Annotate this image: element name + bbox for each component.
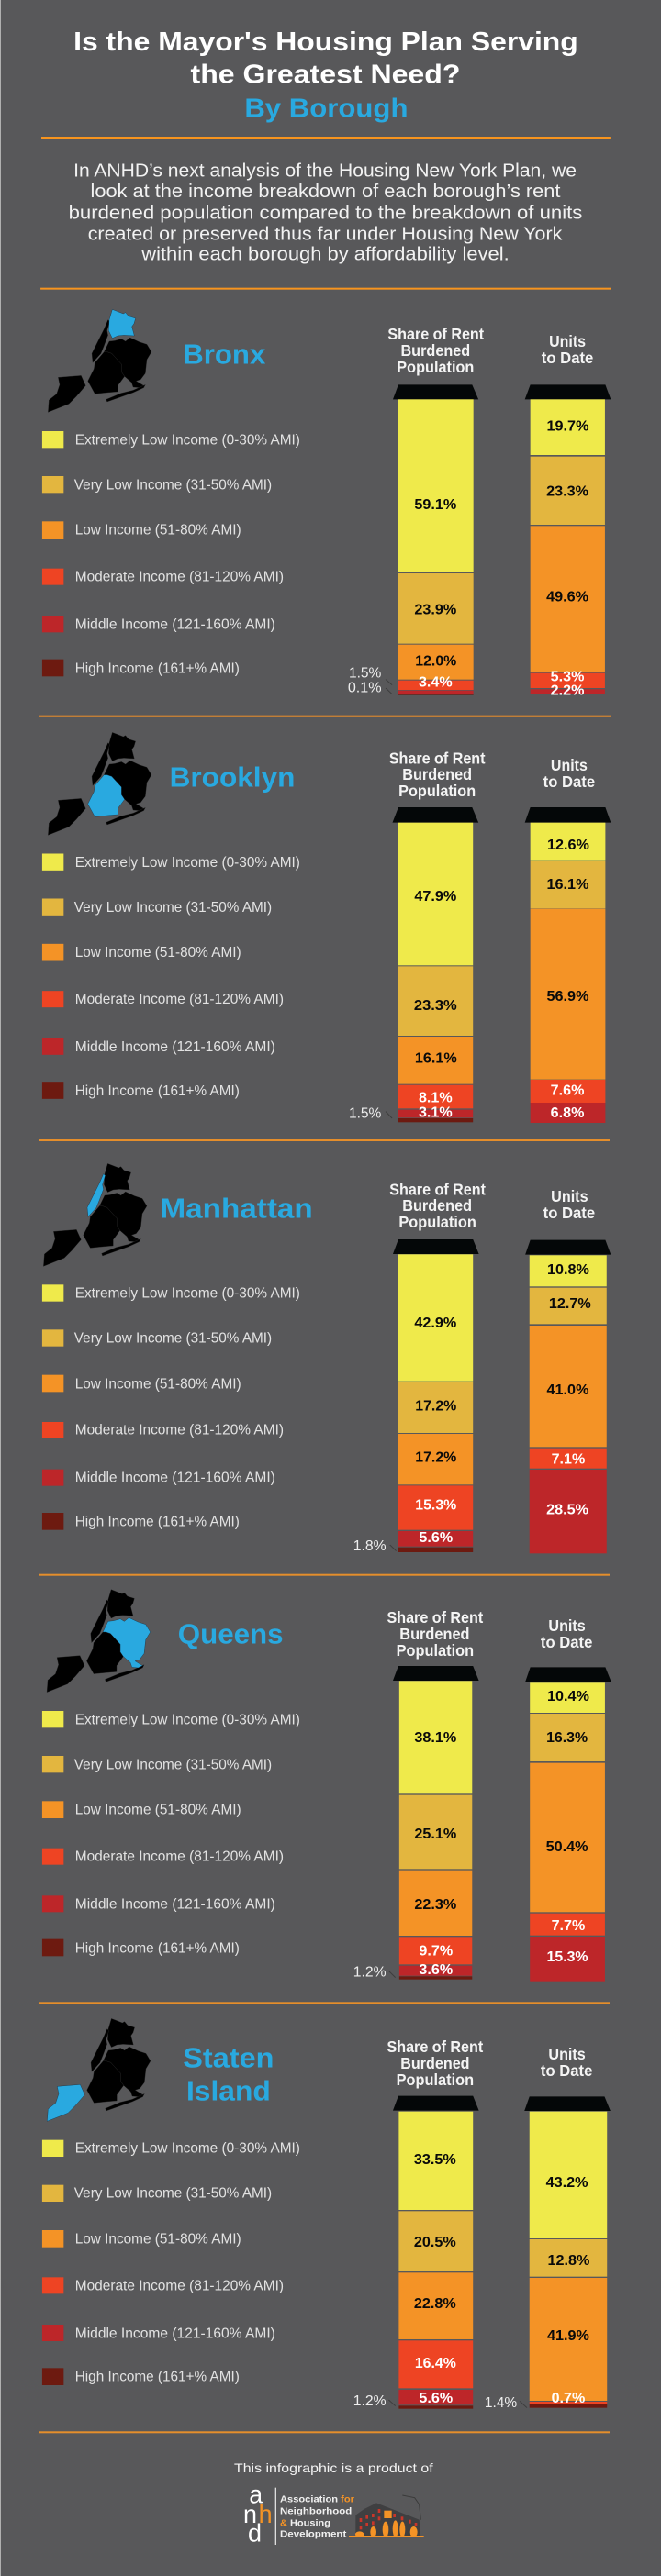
chart: share of rent burdened population: [349, 807, 478, 1122]
legend item: moderate: Moderate Income (81-120% AMI): [75, 1421, 284, 1438]
segment 15.3%: 15.3%: [547, 1949, 588, 1964]
segment 59.1%: [398, 399, 474, 572]
legend item: very low: Very Low Income (31-50% AMI): [74, 2184, 272, 2201]
legend item: high: [42, 660, 240, 676]
segment 23.3%: 23.3%: [414, 997, 457, 1013]
legend item: middle: Middle Income (121-160% AMI): [75, 1469, 275, 1485]
column heading: units: Units: [548, 1616, 586, 1635]
legend item: extremely low: Extremely Low Income (0-30% AMI): [75, 1285, 300, 1301]
heading: Brooklyn: Brooklyn: [170, 761, 295, 793]
column heading: units: [542, 331, 593, 367]
icon: NYC map, Manhattan highlighted: [43, 1163, 147, 1266]
panel: Brooklyn: [42, 732, 611, 1123]
segment 42.9%: 42.9%: [414, 1315, 456, 1330]
segment 3.1%: 3.1%: [419, 1105, 453, 1120]
legend item: high: High Income (161+% AMI): [75, 2368, 240, 2384]
segment 10.8%: 10.8%: [547, 1261, 589, 1277]
column heading: share: Share of Rent: [387, 2037, 483, 2056]
legend item: middle: Middle Income (121-160% AMI): [75, 2325, 275, 2341]
heading: Staten Island: Staten: [183, 2042, 274, 2073]
segment 19.7%: 19.7%: [547, 417, 589, 434]
legend item: low: Low Income (51-80% AMI): [75, 1801, 241, 1817]
column heading: units: Units: [549, 331, 586, 350]
legend item: low: Low Income (51-80% AMI): [75, 1375, 241, 1392]
segment 16.1%: 16.1%: [547, 876, 589, 892]
segment 23.3%: [531, 457, 605, 525]
legend item: low: [42, 1801, 241, 1818]
legend item: moderate: [42, 1848, 284, 1865]
segment 12.0%: 12.0%: [415, 652, 456, 669]
icon: NYC map, Brooklyn highlighted: [48, 732, 151, 835]
segment 15.3%: [530, 1937, 605, 1982]
segment 7.1%: [530, 1449, 607, 1469]
legend item: low: [42, 1375, 241, 1392]
column heading: units: to Date: [543, 772, 595, 791]
segment 17.2%: [398, 1434, 473, 1484]
segment 49.6%: [531, 526, 605, 672]
legend item: moderate: Moderate Income (81-120% AMI): [75, 568, 284, 584]
segment 7.7%: 7.7%: [552, 1917, 586, 1933]
legend item: very low: [42, 898, 272, 916]
column heading: units: to Date: [543, 1203, 595, 1222]
panel: Manhattan: [42, 1163, 611, 1553]
segment 33.5%: [398, 2112, 473, 2210]
side label 1.2%: 1.2%: [353, 2393, 387, 2408]
legend item: middle: Middle Income (121-160% AMI): [75, 1038, 275, 1054]
column heading: units: Units: [548, 2044, 586, 2063]
icon: NYC map, Bronx highlighted: [48, 309, 151, 412]
segment 6.8%: 6.8%: [551, 1105, 585, 1120]
logo: organisation name: Association for: [280, 2494, 354, 2504]
panel: Staten Island: [42, 2018, 611, 2410]
title: [73, 27, 578, 123]
segment 28.5%: [530, 1470, 607, 1553]
legend item: high: [42, 1082, 240, 1099]
legend item: middle: [42, 616, 275, 632]
segment 59.1%: 59.1%: [414, 496, 456, 512]
legend item: extremely low: Extremely Low Income (0-30% AMI): [75, 854, 300, 870]
segment 16.1%: [398, 1037, 473, 1084]
column heading: units: [541, 1616, 592, 1651]
segment 38.1%: [399, 1681, 472, 1793]
column heading: share: Population: [397, 1640, 474, 1660]
intro paragraph: within each borough by affordability level.: [140, 244, 510, 264]
segment 5.6%: [398, 1529, 473, 1547]
legend item: extremely low: Extremely Low Income (0-30% AMI): [75, 1711, 300, 1727]
column heading: units: [541, 2044, 592, 2080]
legend: [42, 431, 300, 676]
segment 28.5%: 28.5%: [546, 1501, 588, 1517]
chart: share of rent burdened population: [348, 384, 478, 695]
icon: NYC map, Queens highlighted: [47, 1590, 151, 1693]
segment 41.0%: 41.0%: [547, 1382, 589, 1397]
segment 16.4%: [398, 2340, 473, 2388]
legend item: very low: [42, 2184, 272, 2202]
segment 20.5%: [398, 2211, 473, 2271]
segment 7.1%: 7.1%: [552, 1450, 586, 1467]
chart: share of rent burdened population: [353, 1239, 479, 1553]
logo: anhd monogram: [243, 2480, 276, 2548]
side label 1.2%: 1.2%: [353, 1963, 387, 1980]
legend item: high: [42, 1513, 240, 1530]
intro paragraph: [69, 161, 582, 264]
segment 12.8%: [530, 2239, 607, 2277]
logo: anhd monogram: n: [243, 2500, 257, 2528]
segment 7.7%: [530, 1914, 605, 1936]
legend item: middle: [42, 2325, 275, 2341]
legend item: very low: Very Low Income (31-50% AMI): [74, 1330, 272, 1346]
segment 3.1%: [398, 1105, 473, 1120]
segment 16.3%: 16.3%: [546, 1729, 588, 1745]
segment 47.9%: 47.9%: [414, 888, 456, 904]
segment 16.4%: 16.4%: [415, 2355, 456, 2371]
column heading: share: Burdened: [402, 764, 472, 783]
legend item: middle: Middle Income (121-160% AMI): [75, 616, 275, 632]
column heading: units: to Date: [541, 1632, 592, 1651]
segment 17.2%: 17.2%: [415, 1397, 456, 1414]
legend item: moderate: [42, 991, 284, 1007]
segment 50.4%: [530, 1763, 605, 1912]
panel: Bronx: [42, 309, 611, 698]
legend item: extremely low: [42, 1711, 300, 1727]
column heading: share: Burdened: [400, 340, 470, 360]
segment 8.1%: 8.1%: [419, 1090, 453, 1105]
legend item: extremely low: [42, 431, 300, 448]
heading: Bronx: Bronx: [183, 339, 266, 370]
segment 7.6%: [531, 1080, 605, 1103]
chart: units to date: [525, 384, 611, 698]
legend item: very low: Very Low Income (31-50% AMI): [74, 476, 272, 493]
segment 25.1%: [399, 1795, 472, 1869]
segment 0.7%: 0.7%: [552, 2390, 586, 2405]
logo: organisation name: Development: [280, 2530, 347, 2540]
segment 5.6%: [398, 2390, 473, 2405]
segment 16.1%: 16.1%: [415, 1049, 457, 1066]
segment 20.5%: 20.5%: [414, 2234, 456, 2249]
column heading: units: to Date: [542, 348, 593, 367]
legend item: moderate: [42, 568, 284, 585]
segment 9.7%: 9.7%: [419, 1942, 453, 1959]
heading: Staten Island: [183, 2042, 274, 2106]
logo: anhd monogram: h: [259, 2500, 273, 2528]
logo: organisation name: Neighborhood: [280, 2507, 352, 2517]
segment 17.2%: 17.2%: [415, 1449, 456, 1465]
side label 1.5%: 1.5%: [349, 1105, 382, 1121]
segment 12.8%: 12.8%: [547, 2252, 590, 2268]
segment 41.0%: [530, 1326, 607, 1447]
segment 41.9%: [530, 2278, 607, 2401]
segment 47.9%: [398, 823, 473, 965]
icon: NYC map, Staten Island highlighted: [47, 2018, 151, 2121]
segment 10.4%: 10.4%: [547, 1688, 589, 1704]
legend item: extremely low: Extremely Low Income (0-30% AMI): [75, 431, 300, 448]
column heading: share: Burdened: [399, 1624, 470, 1643]
column heading: share: Share of Rent: [389, 749, 486, 767]
legend item: moderate: Moderate Income (81-120% AMI): [75, 2277, 284, 2293]
segment 12.7%: [530, 1288, 607, 1324]
segment 2.2%: [531, 682, 605, 698]
legend item: middle: [42, 1038, 275, 1055]
column heading: share: Burdened: [402, 1195, 472, 1215]
segment 3.6%: [399, 1961, 472, 1977]
column heading: units: to Date: [541, 2060, 592, 2080]
footer: [234, 2460, 433, 2548]
segment 15.3%: 15.3%: [415, 1496, 456, 1513]
legend item: very low: [42, 1329, 272, 1347]
side label 1.4%: 1.4%: [485, 2394, 517, 2410]
segment 56.9%: 56.9%: [547, 988, 589, 1004]
heading: Staten Island: Island: [186, 2075, 271, 2106]
column heading: units: [543, 755, 595, 791]
segment 43.2%: [530, 2112, 607, 2238]
segment 5.6%: 5.6%: [419, 2390, 453, 2405]
segment 23.3%: [398, 966, 473, 1036]
legend item: high: High Income (161+% AMI): [75, 660, 240, 676]
legend item: low: Low Income (51-80% AMI): [75, 521, 241, 538]
segment 8.1%: [398, 1085, 473, 1108]
legend item: extremely low: [42, 853, 300, 871]
legend item: low: [42, 2230, 241, 2248]
segment 2.2%: 2.2%: [551, 682, 585, 698]
legend item: high: [42, 2368, 240, 2385]
side label 0.1%: 0.1%: [348, 679, 382, 695]
footer credit text: This infographic is a product of: [234, 2460, 433, 2475]
segment 12.6%: [531, 823, 605, 861]
segment 33.5%: 33.5%: [414, 2151, 456, 2167]
column heading: share: Population: [397, 357, 474, 376]
segment 41.9%: 41.9%: [547, 2327, 589, 2343]
segment 0.7%: [530, 2390, 607, 2405]
segment 19.7%: [531, 399, 605, 455]
legend item: middle: Middle Income (121-160% AMI): [75, 1895, 275, 1912]
title: By Borough: [244, 94, 408, 123]
title: the Greatest Need?: [191, 60, 460, 89]
chart: share of rent burdened population: [353, 2096, 479, 2409]
legend: [42, 1711, 300, 1956]
segment 23.9%: 23.9%: [414, 601, 456, 617]
segment 5.3%: [531, 668, 605, 688]
column heading: share: [387, 1607, 483, 1660]
segment 17.2%: [398, 1382, 473, 1433]
segment 25.1%: 25.1%: [414, 1826, 456, 1841]
legend item: high: High Income (161+% AMI): [75, 1939, 240, 1956]
heading: Manhattan: Manhattan: [160, 1193, 313, 1224]
legend item: moderate: Moderate Income (81-120% AMI): [75, 1848, 284, 1864]
segment 5.6%: 5.6%: [419, 1529, 453, 1545]
segment 56.9%: [531, 909, 605, 1080]
column heading: share: [389, 1180, 486, 1231]
legend item: very low: Very Low Income (31-50% AMI): [74, 1756, 272, 1772]
segment 10.8%: [530, 1255, 607, 1286]
segment 16.3%: [530, 1714, 605, 1761]
segment 12.6%: 12.6%: [547, 837, 589, 852]
legend: [42, 1284, 300, 1530]
segment 22.8%: 22.8%: [414, 2295, 456, 2311]
segment 22.3%: [399, 1871, 472, 1936]
chart: units to date: [525, 1240, 611, 1553]
column heading: share: Population: [398, 1212, 476, 1231]
segment 42.9%: [398, 1254, 473, 1382]
segment 23.9%: [398, 573, 474, 644]
segment 22.8%: [398, 2272, 473, 2339]
segment 22.3%: 22.3%: [414, 1896, 456, 1912]
legend item: high: High Income (161+% AMI): [75, 1513, 240, 1529]
side label 1.5%: 1.5%: [349, 664, 382, 681]
column heading: share: Share of Rent: [387, 324, 484, 343]
segment 23.3%: 23.3%: [546, 483, 588, 499]
column heading: share: Share of Rent: [389, 1180, 486, 1198]
legend item: extremely low: Extremely Low Income (0-30% AMI): [75, 2139, 300, 2156]
segment 6.8%: [531, 1103, 605, 1123]
segment 3.4%: [398, 673, 474, 690]
segment 50.4%: 50.4%: [546, 1838, 588, 1854]
heading: Queens: Queens: [178, 1618, 284, 1649]
chart: units to date: [525, 807, 611, 1123]
legend item: middle: [42, 1895, 275, 1912]
logo: building and people illustration: [349, 2495, 424, 2537]
legend item: very low: [42, 476, 272, 493]
legend item: low: Low Income (51-80% AMI): [75, 2230, 241, 2247]
segment 5.3%: 5.3%: [551, 668, 585, 684]
legend: [42, 2139, 300, 2385]
chart: units to date: [485, 2096, 611, 2410]
panel: Queens: [42, 1590, 611, 1982]
column heading: share: [389, 749, 486, 800]
segment 10.4%: [530, 1682, 605, 1713]
legend item: moderate: [42, 2277, 284, 2293]
logo: organisation name: [280, 2494, 354, 2540]
segment 12.7%: 12.7%: [549, 1295, 591, 1311]
legend item: high: High Income (161+% AMI): [75, 1083, 240, 1098]
legend item: low: [42, 944, 241, 960]
legend item: moderate: [42, 1421, 284, 1438]
segment 9.7%: [399, 1937, 472, 1964]
segment 16.1%: [531, 861, 605, 908]
column heading: share: Population: [397, 2070, 474, 2089]
legend: [42, 853, 300, 1099]
column heading: share: [387, 2037, 483, 2089]
legend item: extremely low: [42, 2139, 300, 2157]
legend item: low: [42, 521, 241, 539]
column heading: share: Population: [398, 781, 476, 800]
column heading: share: Burdened: [400, 2053, 470, 2072]
chart: share of rent burdened population: [353, 1666, 479, 1980]
segment 3.6%: 3.6%: [419, 1961, 453, 1977]
segment 38.1%: 38.1%: [414, 1729, 456, 1745]
column heading: share: Share of Rent: [387, 1607, 483, 1627]
logo: organisation name: & Housing: [280, 2519, 330, 2529]
legend item: high: [42, 1939, 240, 1956]
header: [40, 27, 611, 290]
logo: anhd monogram: d: [248, 2519, 262, 2548]
segment 43.2%: 43.2%: [546, 2174, 588, 2190]
legend item: extremely low: [42, 1284, 300, 1302]
column heading: share: [387, 324, 484, 376]
column heading: units: [543, 1186, 595, 1222]
side label 1.8%: 1.8%: [353, 1538, 387, 1553]
legend item: low: Low Income (51-80% AMI): [75, 944, 241, 960]
legend item: middle: [42, 1469, 275, 1486]
legend item: moderate: Moderate Income (81-120% AMI): [75, 991, 284, 1006]
segment 7.6%: 7.6%: [551, 1082, 585, 1098]
column heading: units: Units: [551, 755, 588, 774]
column heading: units: Units: [551, 1186, 588, 1205]
segment 12.0%: [398, 645, 474, 680]
segment 49.6%: 49.6%: [546, 588, 588, 605]
chart: units to date: [525, 1667, 611, 1982]
segment 3.4%: 3.4%: [419, 673, 453, 690]
legend item: very low: Very Low Income (31-50% AMI): [74, 899, 272, 915]
segment 15.3%: [398, 1485, 473, 1530]
logo: anhd monogram: a: [249, 2480, 263, 2508]
legend item: very low: [42, 1756, 272, 1772]
